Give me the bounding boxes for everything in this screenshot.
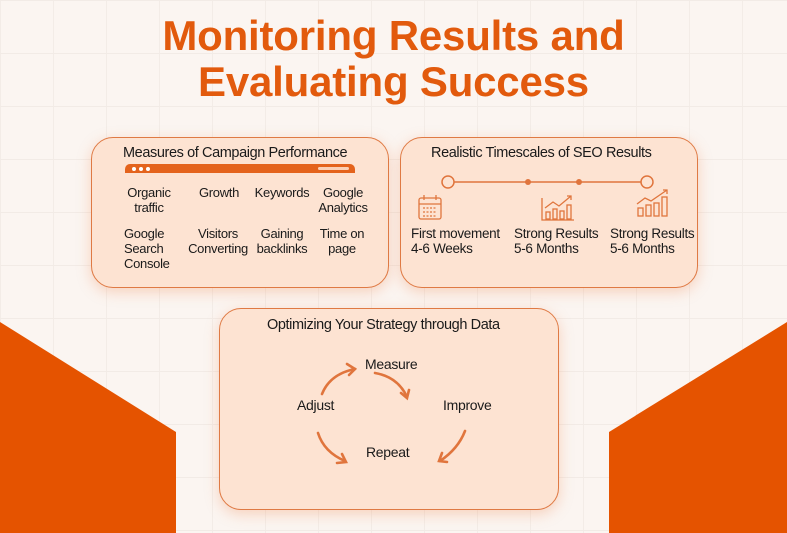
panel: campaign performance bbox=[91, 137, 389, 288]
metrics: traffic bbox=[134, 200, 164, 215]
labels: First movement bbox=[411, 226, 500, 241]
panel: timescales: 5-6 Months bbox=[514, 241, 579, 256]
panel: campaign performance: Converting bbox=[188, 241, 248, 256]
panel: campaign performance: Visitors bbox=[198, 226, 238, 241]
title: Evaluating Success bbox=[198, 58, 589, 105]
title bbox=[162, 12, 625, 105]
timeline bbox=[418, 175, 668, 221]
icon: calendar bbox=[419, 195, 441, 219]
panel: timescales: Strong Results bbox=[610, 226, 694, 241]
icon: growth chart bbox=[637, 190, 667, 216]
panel: campaign performance: Growth bbox=[199, 185, 239, 200]
panel: campaign performance: Keywords bbox=[255, 185, 309, 200]
labels bbox=[411, 226, 500, 256]
panel: optimizing bbox=[219, 308, 559, 510]
heading: Measures of Campaign Performance bbox=[123, 145, 347, 161]
icon: chart bbox=[542, 196, 574, 220]
panel: timescales: 5-6 Months bbox=[610, 241, 675, 256]
panel: optimizing: Repeat bbox=[366, 444, 409, 460]
labels: 4-6 Weeks bbox=[411, 241, 473, 256]
panel: campaign performance: Console bbox=[124, 256, 170, 271]
panel: campaign performance: page bbox=[328, 241, 356, 256]
panel: campaign performance: Analytics bbox=[318, 200, 368, 215]
panel: timescales: Strong Results bbox=[514, 226, 598, 241]
browser bar bbox=[125, 164, 355, 173]
cycle arrows bbox=[316, 362, 466, 464]
heading: Realistic Timescales of SEO Results bbox=[431, 145, 652, 161]
cycle labels: Measure bbox=[365, 356, 417, 372]
panel: campaign performance: Google bbox=[323, 185, 363, 200]
panel: campaign performance: Gaining bbox=[261, 226, 303, 241]
metrics bbox=[127, 185, 171, 215]
metrics: Organic bbox=[127, 185, 171, 200]
panel: campaign performance: Search bbox=[124, 241, 163, 256]
panel: campaign performance: Time on bbox=[320, 226, 364, 241]
panel: optimizing: Adjust bbox=[297, 397, 334, 413]
heading: Optimizing Your Strategy through Data bbox=[267, 317, 500, 333]
panel: campaign performance: Google bbox=[124, 226, 164, 241]
panel: optimizing: Improve bbox=[443, 397, 491, 413]
panel: campaign performance: backlinks bbox=[257, 241, 307, 256]
title: Monitoring Results and bbox=[162, 12, 625, 59]
panel: timescales bbox=[400, 137, 698, 288]
